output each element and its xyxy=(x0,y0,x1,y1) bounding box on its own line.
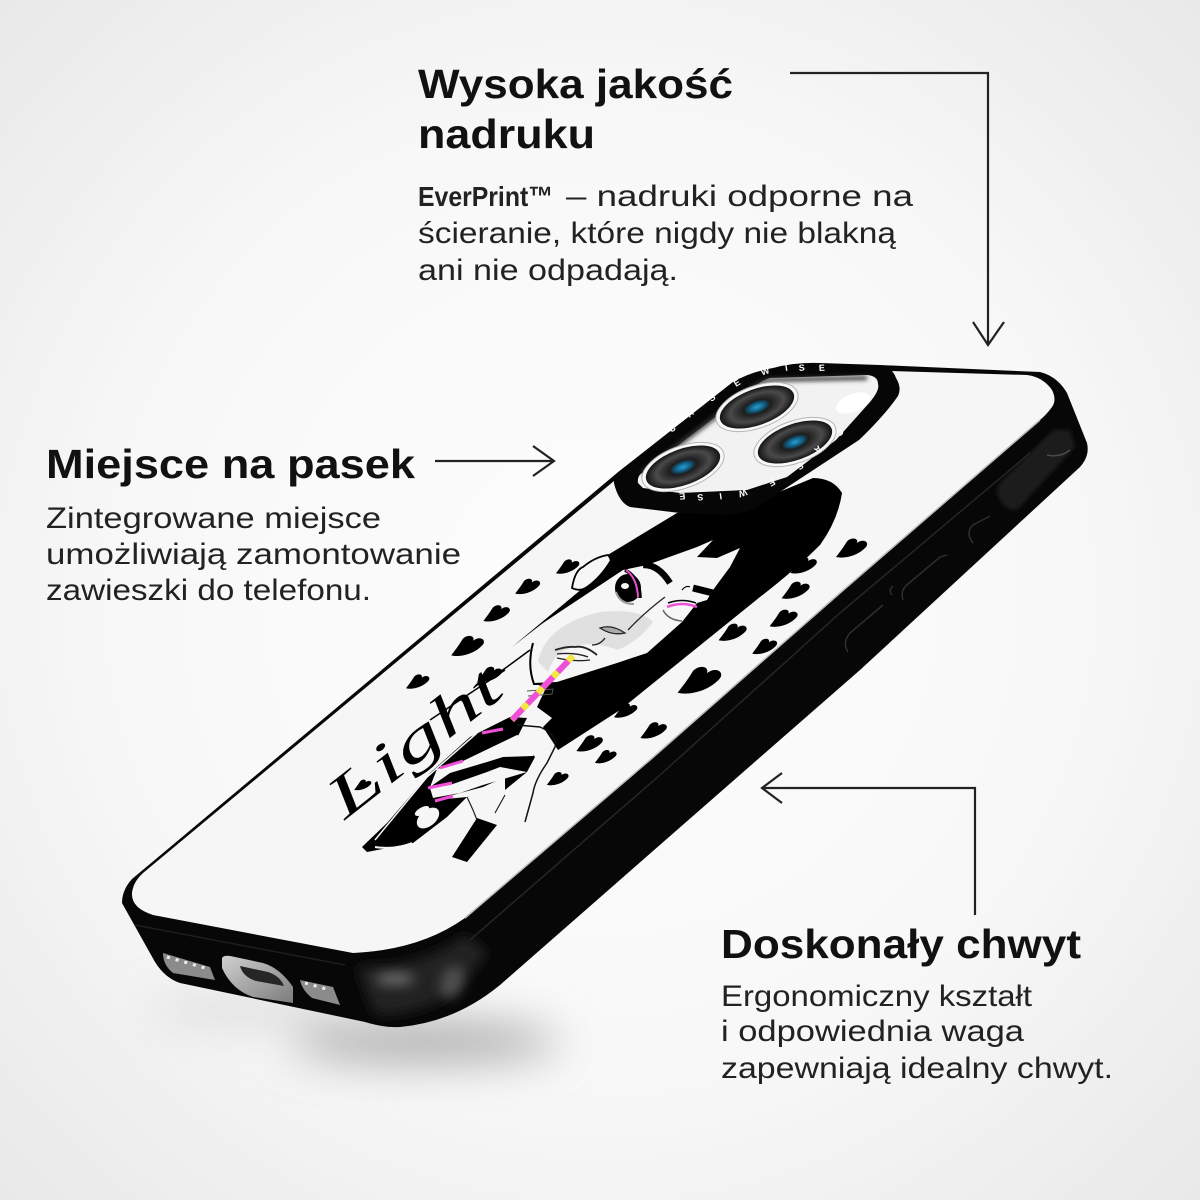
highlight along edge xyxy=(465,420,1040,918)
printed illustration xyxy=(312,478,867,862)
text: print quality xyxy=(418,180,913,287)
heading: grip: Doskonały chwyt xyxy=(721,921,1081,967)
text: strap slot xyxy=(46,502,461,607)
lens left xyxy=(635,433,731,501)
heading: print quality: Wysoka jakość xyxy=(418,61,733,107)
side button panel xyxy=(997,430,1075,510)
corner gloss xyxy=(358,935,488,1015)
arrow: strap slot xyxy=(435,446,554,476)
heading: strap slot: Miejsce na pasek xyxy=(46,441,415,487)
charging port xyxy=(222,956,293,1003)
phone with printed case xyxy=(122,363,1088,1027)
hand xyxy=(362,717,555,862)
flash highlight xyxy=(833,388,873,418)
text: strap slot: umożliwiają zamontowanie xyxy=(46,538,461,571)
arrow: print quality xyxy=(790,73,1004,345)
stray hair strand xyxy=(500,650,530,672)
callout: strap slot xyxy=(46,441,461,607)
brand ring text: CASEWISE xyxy=(666,363,825,435)
callout: print quality xyxy=(418,61,913,287)
text: print quality: ani nie odpadają. xyxy=(418,254,678,287)
housing inner wall xyxy=(642,378,867,473)
arrow: grip xyxy=(762,773,975,915)
right speaker xyxy=(300,980,340,1005)
nails xyxy=(428,729,503,801)
text: print quality: – nadruki odporne na xyxy=(566,180,913,213)
ear xyxy=(572,555,611,590)
face xyxy=(530,540,740,683)
text: grip: zapewniają idealny chwyt. xyxy=(721,1052,1113,1085)
camera bump xyxy=(614,363,900,515)
eye left xyxy=(616,565,670,604)
text: grip xyxy=(721,980,1113,1085)
script lettering: Light xyxy=(312,651,517,831)
finger on straw xyxy=(527,689,553,696)
phone shadow xyxy=(150,1000,560,1062)
callout: grip xyxy=(721,921,1113,1085)
hearts xyxy=(354,538,867,790)
cheek shading xyxy=(538,611,653,672)
printed back panel xyxy=(132,371,1054,953)
left speaker xyxy=(163,953,215,980)
case body xyxy=(122,365,1088,1027)
brand ring text: CASEWISE xyxy=(679,426,846,502)
text: print quality: EverPrint™ xyxy=(418,181,553,212)
text: strap slot: Zintegrowane miejsce xyxy=(46,502,381,535)
lens top xyxy=(709,373,805,441)
text: grip: Ergonomiczny kształt xyxy=(721,980,1033,1013)
bump outer frame xyxy=(614,363,900,515)
jaw line xyxy=(530,643,548,684)
case side details xyxy=(135,450,1070,965)
text: print quality: ścieranie, które nigdy nie blakną xyxy=(418,217,896,250)
heading: print quality xyxy=(418,61,733,157)
hair xyxy=(512,478,842,750)
long stroke xyxy=(430,670,505,720)
brand ring text xyxy=(666,363,846,502)
heading: print quality: nadruku xyxy=(418,111,595,157)
lens housing xyxy=(638,375,878,493)
straw xyxy=(512,656,573,720)
text: strap slot: zawieszki do telefonu. xyxy=(46,574,371,607)
text: grip: i odpowiednia waga xyxy=(721,1015,1024,1048)
nose and lips xyxy=(555,597,665,661)
eye right xyxy=(663,586,713,621)
lens right xyxy=(747,408,843,476)
